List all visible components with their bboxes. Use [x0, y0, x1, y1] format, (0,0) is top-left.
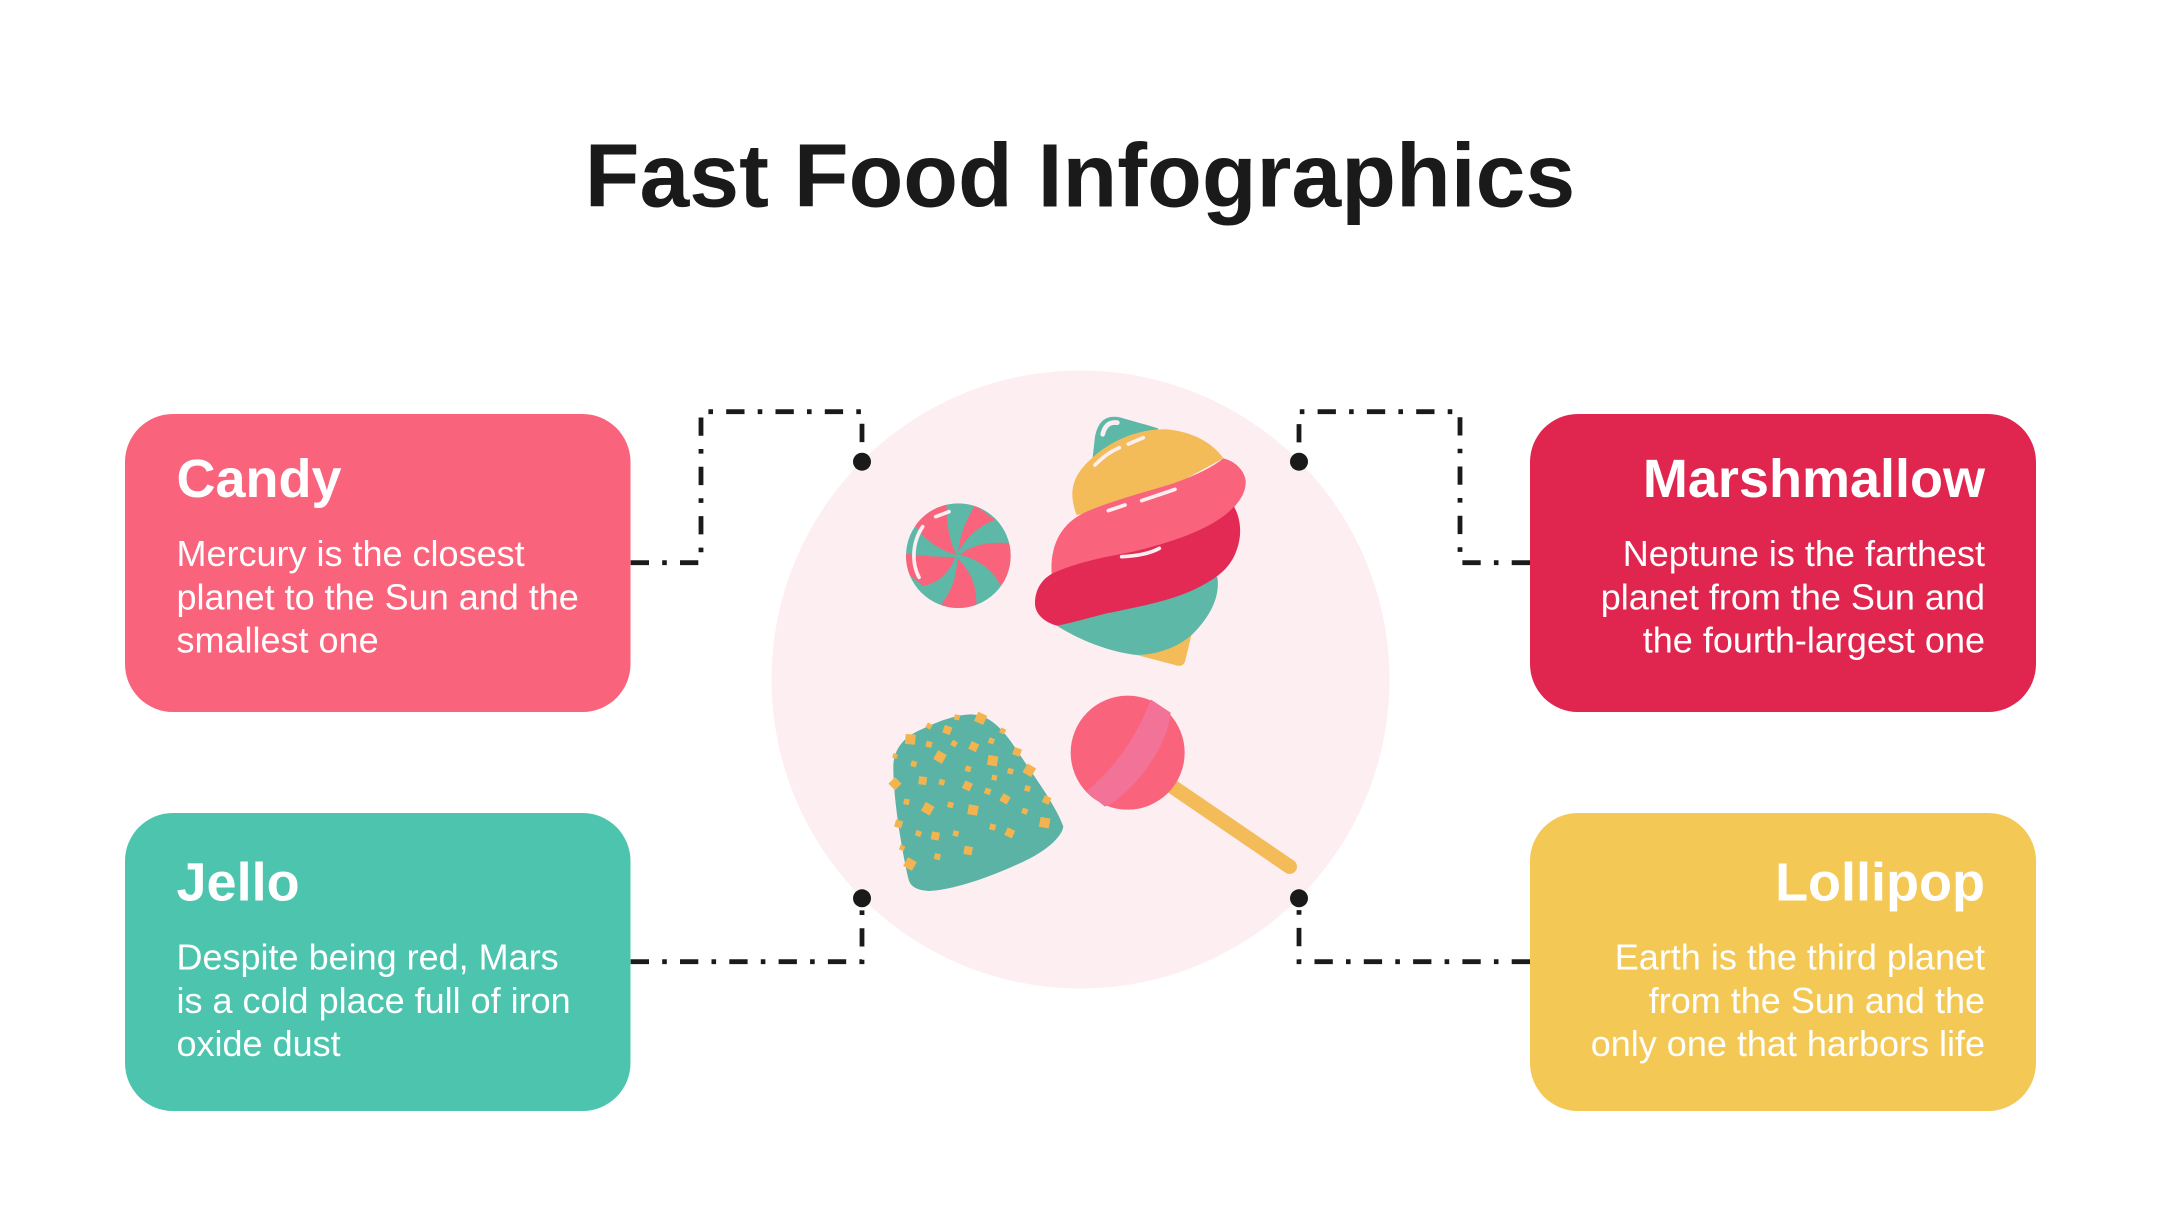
- icon: lollipop: [1071, 696, 1290, 867]
- text: candy description: planet to the Sun and the: [176, 576, 579, 617]
- text: jello description: [176, 936, 571, 1064]
- text: lollipop description: only one that harbors life: [1591, 1023, 1985, 1064]
- text: lollipop description: [1591, 936, 1985, 1064]
- panel: lollipop: [1530, 813, 2036, 1111]
- icon: swirled marshmallow cone: [1035, 417, 1246, 666]
- text: jello description: Despite being red, Mars: [176, 936, 559, 978]
- connector: lollipop card to circle: [1290, 889, 1530, 962]
- central circle: [772, 370, 1390, 988]
- heading: marshmallow: Marshmallow: [1643, 449, 1986, 509]
- text: marshmallow description: the fourth-largest one: [1643, 620, 1985, 661]
- text: marshmallow description: [1601, 533, 1985, 661]
- connector: marshmallow card to circle: [1290, 412, 1530, 563]
- connector: candy card to circle: [631, 412, 871, 563]
- panel: jello: [125, 813, 630, 1111]
- icon: swirl candy: [903, 503, 1012, 610]
- text: jello description: is a cold place full of iron: [176, 980, 571, 1021]
- icon: sprinkled gumdrop: [889, 713, 1063, 891]
- text: lollipop description: from the Sun and the: [1649, 980, 1985, 1021]
- title: Fast Food Infographics: [585, 126, 1575, 226]
- text: marshmallow description: planet from the Sun and: [1601, 576, 1985, 617]
- heading: candy: Candy: [176, 449, 342, 509]
- heading: jello: Jello: [176, 852, 300, 912]
- text: candy description: [176, 533, 579, 661]
- panel: marshmallow: [1530, 414, 2036, 712]
- text: lollipop description: Earth is the third planet: [1615, 936, 1985, 978]
- panel: candy: [125, 414, 630, 712]
- text: marshmallow description: Neptune is the farthest: [1623, 533, 1985, 574]
- text: candy description: Mercury is the closest: [176, 533, 525, 574]
- text: candy description: smallest one: [176, 620, 379, 661]
- text: jello description: oxide dust: [176, 1023, 341, 1064]
- connector: jello card to circle: [631, 889, 871, 962]
- heading: lollipop: Lollipop: [1775, 852, 1985, 912]
